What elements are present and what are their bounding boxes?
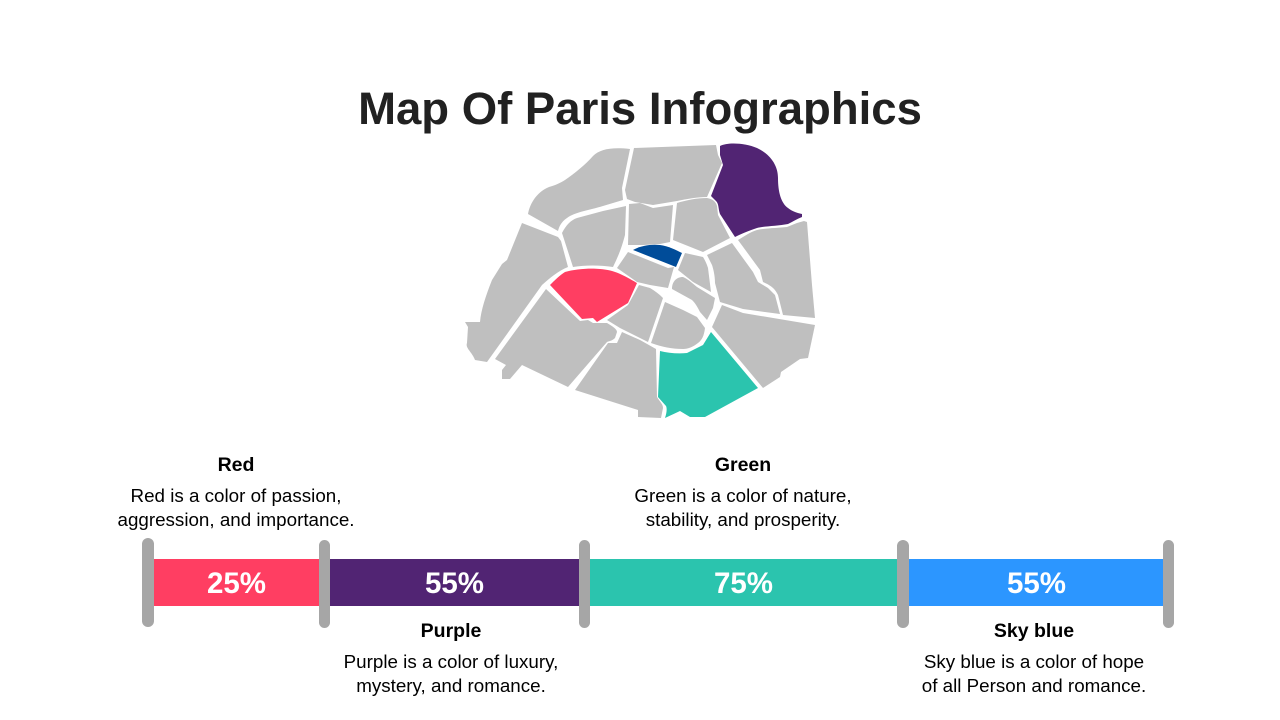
divider handle 3	[579, 540, 590, 628]
text block: green	[634, 454, 852, 530]
text block: sky blue	[922, 620, 1146, 696]
bar: sky blue 55%	[909, 559, 1164, 606]
text block: purple: mystery, and romance.	[356, 675, 546, 696]
text block: purple: Purple	[421, 620, 481, 642]
text block: red	[118, 454, 354, 530]
bar: red 25%: 25%	[207, 567, 266, 600]
bar: purple 55%: 55%	[425, 567, 484, 600]
text block: purple	[344, 620, 558, 696]
divider handle 2	[319, 540, 330, 628]
text block: sky blue: Sky blue is a color of hope	[924, 651, 1144, 672]
bar: red 25%	[154, 559, 319, 606]
text block: sky blue: of all Person and romance.	[922, 675, 1146, 696]
text block: green: stability, and prosperity.	[646, 509, 840, 530]
divider handle 4	[897, 540, 909, 628]
bar: green 75%	[590, 559, 897, 606]
text block: sky blue: Sky blue	[994, 620, 1074, 642]
region: dark blue	[633, 245, 682, 267]
divider handle 5	[1163, 540, 1174, 628]
region: green	[658, 332, 758, 418]
bar: green 75%: 75%	[714, 567, 773, 600]
text block: red: Red is a color of passion,	[131, 485, 341, 506]
region: purple	[711, 144, 802, 237]
text block: red: Red	[218, 454, 254, 476]
bar: sky blue 55%: 55%	[1007, 567, 1066, 600]
text block: green: Green	[715, 454, 771, 476]
region: red	[550, 269, 637, 322]
title: Map Of Paris Infographics	[358, 83, 922, 134]
text block: red: aggression, and importance.	[118, 509, 354, 530]
text block: purple: Purple is a color of luxury,	[344, 651, 558, 672]
text block: green: Green is a color of nature,	[634, 485, 852, 506]
divider handle 1	[142, 538, 154, 627]
bar: purple 55%	[330, 559, 579, 606]
